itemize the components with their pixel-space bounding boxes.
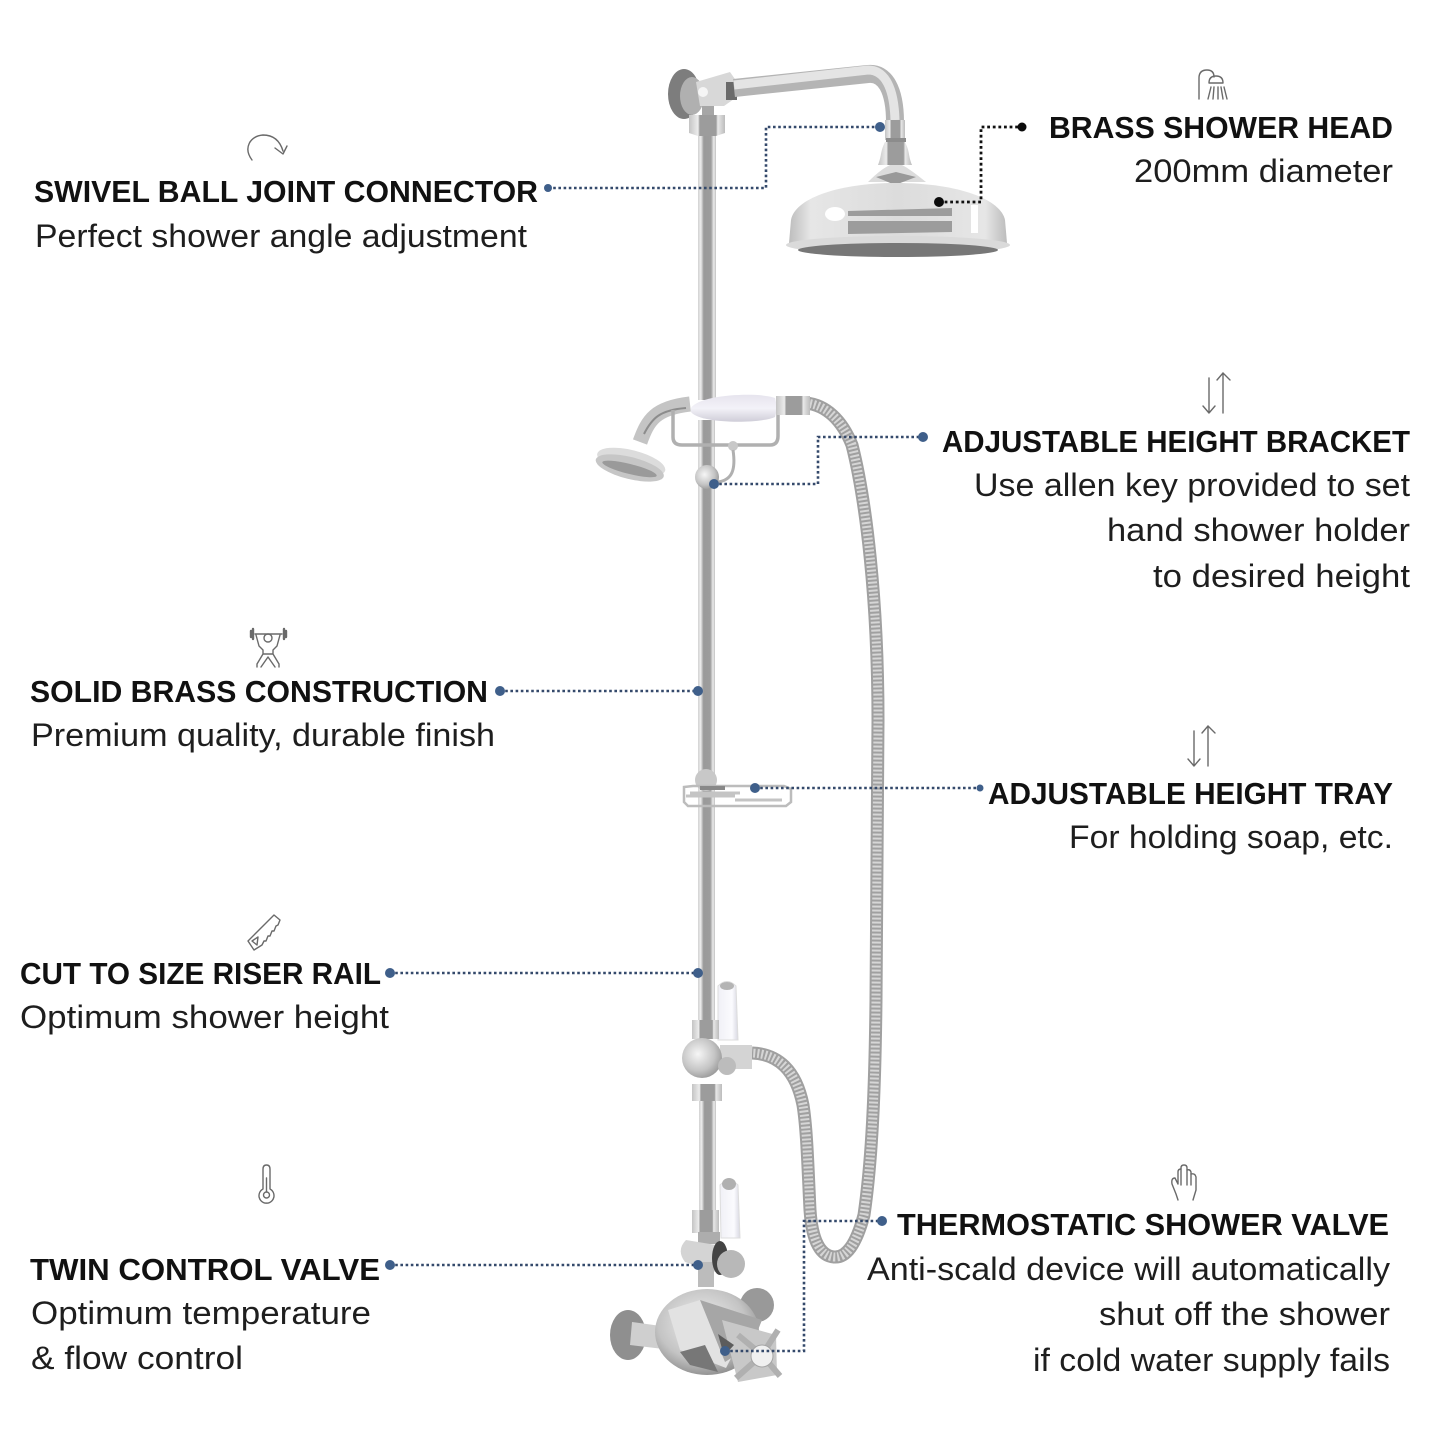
label: adjustable height bracket: ADJUSTABLE HEIGHT BRACKET bbox=[942, 424, 1410, 459]
label: cut to size riser rail bbox=[20, 956, 389, 1035]
label: brass shower head: BRASS SHOWER HEAD bbox=[1049, 110, 1393, 145]
icon: saw bbox=[248, 915, 280, 950]
leader: bracket bbox=[709, 432, 928, 489]
icon: rotate arrow bbox=[248, 135, 287, 160]
label: thermostatic shower valve: Anti-scald device will automatically bbox=[867, 1251, 1390, 1287]
label: swivel ball joint connector bbox=[34, 174, 538, 254]
leader: shower head bbox=[934, 122, 1026, 207]
twin control valve bbox=[681, 1178, 745, 1287]
label: twin control valve: TWIN CONTROL VALVE bbox=[30, 1252, 380, 1287]
label: brass shower head: 200mm diameter bbox=[1134, 153, 1393, 189]
icon: height arrows (tray) bbox=[1188, 726, 1215, 766]
label: twin control valve: Optimum temperature bbox=[31, 1295, 371, 1331]
label: adjustable height tray: For holding soap, etc. bbox=[1069, 819, 1393, 855]
leader: twin control bbox=[385, 1260, 703, 1270]
label: adjustable height bracket bbox=[942, 424, 1410, 594]
riser rail bbox=[698, 130, 716, 1220]
label: swivel ball joint connector: Perfect shower angle adjustment bbox=[35, 218, 527, 254]
label: thermostatic shower valve: if cold water supply fails bbox=[1033, 1342, 1390, 1378]
label: solid brass construction bbox=[30, 674, 495, 753]
label: solid brass construction: SOLID BRASS CONSTRUCTION bbox=[30, 674, 488, 709]
label: adjustable height tray bbox=[988, 776, 1393, 855]
shower arm bbox=[734, 70, 895, 122]
label: cut to size riser rail: Optimum shower height bbox=[20, 999, 389, 1035]
icon: height arrows (bracket) bbox=[1203, 373, 1230, 413]
wall flange and elbow bbox=[668, 69, 744, 136]
icon: weightlifter bbox=[251, 629, 286, 667]
label: swivel ball joint connector: SWIVEL BALL JOINT CONNECTOR bbox=[34, 174, 538, 209]
icon: thermometer bbox=[259, 1165, 274, 1203]
flexible hose bbox=[752, 403, 878, 1257]
thermostatic valve body bbox=[610, 1288, 780, 1382]
label: twin control valve bbox=[30, 1252, 380, 1376]
icon: hand bbox=[1172, 1165, 1196, 1200]
leader: solid brass bbox=[495, 686, 703, 696]
label: adjustable height bracket: hand shower holder bbox=[1107, 512, 1410, 548]
label: adjustable height tray: ADJUSTABLE HEIGHT TRAY bbox=[988, 776, 1393, 811]
label: adjustable height bracket: Use allen key provided to set bbox=[974, 467, 1410, 503]
icon: shower bbox=[1199, 70, 1227, 99]
leader: thermostatic bbox=[720, 1216, 887, 1356]
shower product illustration bbox=[593, 69, 1010, 1382]
label: adjustable height bracket: to desired height bbox=[1153, 558, 1410, 594]
label: thermostatic shower valve: THERMOSTATIC SHOWER VALVE bbox=[897, 1207, 1389, 1242]
label: thermostatic shower valve bbox=[867, 1207, 1390, 1378]
rain shower head bbox=[786, 120, 1010, 257]
diverter valve with white lever bbox=[682, 982, 752, 1101]
label: thermostatic shower valve: shut off the shower bbox=[1099, 1296, 1390, 1332]
leader: tray bbox=[750, 783, 984, 793]
label: cut to size riser rail: CUT TO SIZE RISER RAIL bbox=[20, 956, 381, 991]
hand shower and handle bbox=[593, 395, 810, 489]
label: solid brass construction: Premium quality, durable finish bbox=[31, 717, 495, 753]
leader: swivel joint bbox=[544, 122, 885, 192]
label: twin control valve: & flow control bbox=[31, 1340, 243, 1376]
leader: riser rail bbox=[385, 968, 703, 978]
soap tray bbox=[684, 769, 791, 806]
label: brass shower head bbox=[1049, 110, 1393, 189]
